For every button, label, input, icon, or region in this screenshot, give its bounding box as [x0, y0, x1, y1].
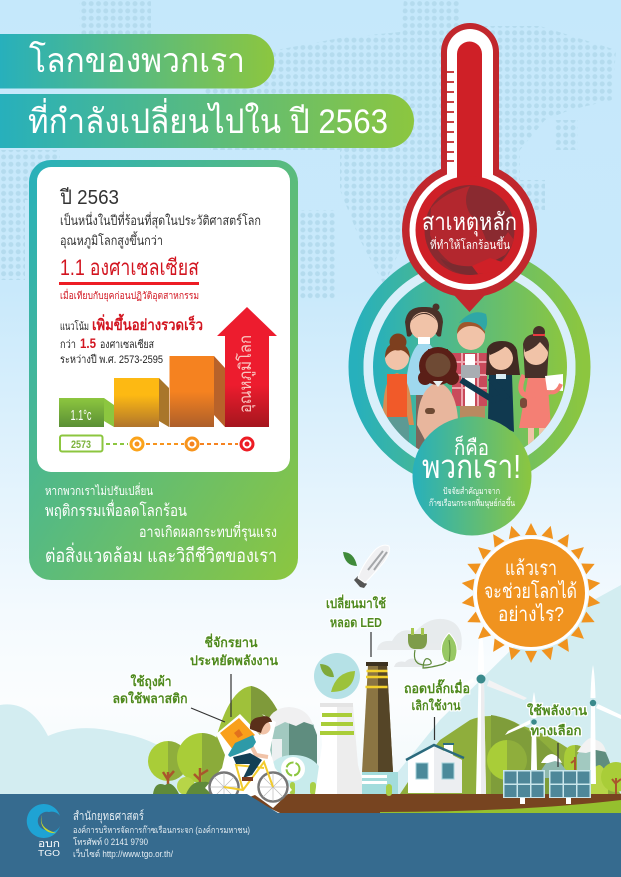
text: makes world warmer: ที่ทำให้โลกร้อนขึ้น — [430, 236, 510, 252]
text block: warning: พฤติกรรมเพื่อลดโลกร้อน — [45, 499, 187, 520]
callout: it is us: ปัจจัยสำคัญมาจาก — [443, 486, 500, 496]
title banner line 1: โลกของพวกเรา — [29, 41, 245, 80]
person: guy with teal cap — [452, 312, 488, 418]
panel: people circle — [356, 254, 583, 480]
world map dots — [0, 0, 621, 300]
dome with recycle icon — [262, 755, 328, 795]
text block: hottest years: อุณหภูมิโลกสูงขึ้นกว่า — [60, 231, 163, 249]
text: compared to pre-industrial: เมื่อเทียบกับยุคก่อนปฏิวัติอุตสาหกรรม — [60, 288, 199, 302]
callout: it is us: ก็คือ — [454, 434, 489, 460]
rider — [228, 716, 272, 781]
snow peaks right — [536, 738, 612, 790]
clouds — [377, 619, 462, 667]
organisation details: โทรศัพท์ 0 2141 9790 — [73, 836, 148, 847]
sun question text: จะช่วยโลกได้ — [484, 580, 577, 603]
icon: sun — [461, 523, 601, 663]
callout: it is us: ก๊าซเรือนกระจกที่มนุษย์ก่อขึ้น — [429, 496, 515, 509]
callout: it is us — [412, 416, 532, 536]
text block: trend: กว่า — [60, 339, 76, 351]
sun question text — [484, 558, 577, 626]
label: unplug — [404, 679, 470, 713]
label: LED: เปลี่ยนมาใช้ — [326, 594, 386, 611]
organisation details: สำนักยุทธศาสตร์ — [73, 809, 144, 824]
text block: warning: ต่อสิ่งแวดล้อม และวิถีชีวิตของเรา — [45, 542, 277, 567]
label: bicycle — [190, 633, 278, 668]
organisation details: องค์การบริหารจัดการก๊าซเรือนกระจก (องค์การมหาชน) — [73, 824, 250, 835]
trees left — [148, 733, 227, 795]
text block: warning: อาจเกิดผลกระทบที่รุนแรง — [139, 521, 277, 542]
delivery box — [220, 718, 255, 750]
bar chart: rising temperature: 1.1°c — [70, 407, 92, 424]
text block: trend: แนวโน้ม — [60, 319, 89, 333]
icon: chimney — [362, 662, 398, 796]
stat: 1.1 degrees: 1.1 องศาเซลเซียส — [60, 255, 199, 280]
icon: house — [406, 743, 464, 793]
icon: small leaf — [343, 552, 357, 566]
label: LED — [326, 594, 386, 630]
person: back woman — [405, 304, 443, 455]
timeline: 2573 — [71, 439, 91, 451]
icon: solar panels — [503, 770, 591, 804]
person: curly hair woman — [417, 347, 459, 440]
logo: TGO — [38, 848, 60, 858]
logo — [27, 804, 60, 858]
people group — [382, 304, 563, 455]
ground green edge — [380, 800, 621, 813]
snow mountain — [262, 707, 318, 794]
label: bicycle: ชี่จักรยาน — [204, 633, 258, 650]
sun question text: แล้วเรา — [505, 558, 557, 580]
logo: อบก — [38, 839, 60, 850]
label: cloth bag — [112, 673, 188, 706]
text block: trend: องศาเซลเซียส — [100, 338, 154, 351]
icon: plug and leaf — [408, 628, 457, 668]
label: alternative energy: ทางเลือก — [530, 723, 582, 738]
label: unplug: ถอดปลั๊กเมื่อ — [404, 679, 470, 696]
thermometer — [402, 23, 537, 312]
green mountain — [205, 686, 300, 794]
label: unplug: เลิกใช้งาน — [412, 697, 461, 713]
label: LED: หลอด LED — [330, 615, 382, 630]
title — [0, 34, 414, 148]
timeline — [60, 436, 253, 452]
label: alternative energy: ใช้พลังงาน — [527, 702, 587, 718]
sun question text: อย่างไร? — [498, 603, 564, 626]
icon: cooling tower — [315, 703, 366, 794]
trees right — [487, 740, 586, 780]
text block: warning — [45, 482, 277, 567]
person: girl in orange — [383, 334, 414, 442]
ground — [240, 794, 621, 813]
person: woman in navy — [461, 341, 520, 432]
title banner line 2 — [0, 94, 414, 148]
bar chart: rising temperature — [59, 307, 277, 427]
icon: LED bulb — [354, 545, 389, 588]
icon: wind turbines — [440, 630, 621, 794]
bar chart: rising temperature: อุณหภูมิโลก — [235, 335, 256, 413]
text block: trend: 1.5 — [80, 335, 96, 351]
label: cloth bag: ลดใช้พลาสติก — [112, 690, 188, 706]
footer — [0, 794, 621, 877]
icon: cyclist — [205, 714, 292, 808]
panel: year 2563 card — [29, 160, 298, 580]
bicycle — [210, 762, 288, 802]
organisation details — [73, 809, 250, 859]
text block: trend: ระหว่างปี พ.ศ. 2573-2595 — [60, 353, 163, 366]
callout: it is us: พวกเรา! — [422, 448, 521, 485]
scene: background hills — [0, 585, 621, 795]
label: alternative energy — [527, 702, 587, 738]
person: woman in pink — [519, 326, 563, 447]
text block: trend: เพิ่มขึ้นอย่างรวดเร็ว — [92, 313, 203, 334]
text block: warning: หากพวกเราไม่ปรับเปลี่ยน — [45, 482, 153, 498]
title banner line 2: ที่กำลังเปลี่ยนไปใน ปี 2563 — [28, 98, 388, 141]
icon: leaf circle — [314, 653, 360, 699]
title banner line 1 — [0, 34, 274, 88]
label: cloth bag: ใช้ถุงผ้า — [130, 673, 172, 690]
heading: main cause: สาเหตุหลัก — [422, 209, 517, 237]
bushes right — [588, 762, 621, 794]
label: bicycle: ประหยัดพลังงาน — [190, 653, 278, 668]
thermometer scale — [447, 72, 454, 161]
stat: 1.1 degrees — [59, 255, 199, 285]
organisation details: เว็บไซต์ http://www.tgo.or.th/ — [73, 847, 173, 859]
leader lines — [191, 632, 558, 767]
text block: hottest years — [60, 211, 261, 249]
text block: trend — [60, 313, 203, 366]
heading: year: ปี 2563 — [60, 187, 119, 209]
globe — [424, 185, 514, 275]
text block: hottest years: เป็นหนึ่งในปีที่ร้อนที่สุดในประวัติศาสตร์โลก — [60, 211, 261, 229]
white halo — [205, 714, 292, 808]
